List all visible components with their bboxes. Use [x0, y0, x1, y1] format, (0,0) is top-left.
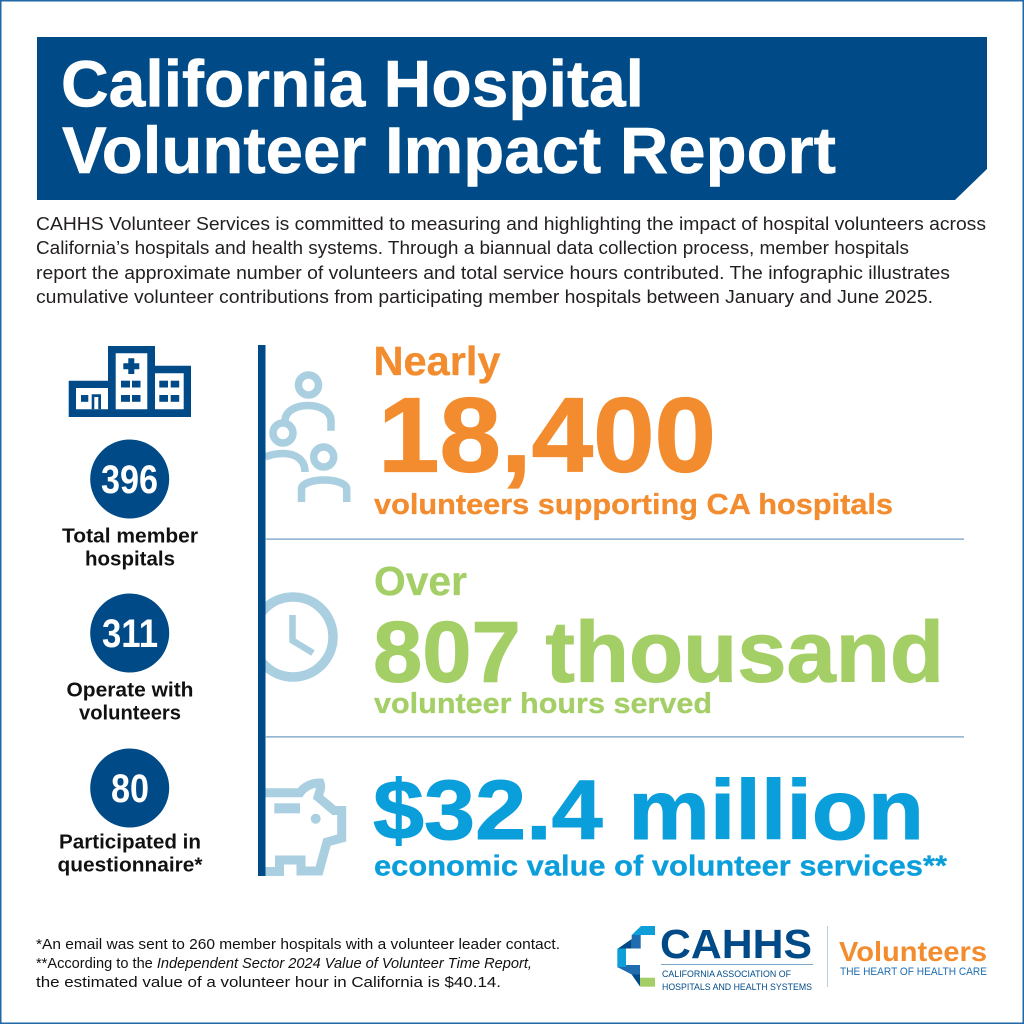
footnotes [36, 937, 560, 991]
footnotes: **According to the Independent Sector 2024 Value of Volunteer Time Report, [36, 956, 532, 972]
stat: total member hospitals: hospitals [85, 548, 175, 570]
stat panel: economic value [373, 763, 948, 882]
icon: volunteers group [265, 375, 347, 502]
stat: total member hospitals: Total member [62, 524, 198, 548]
stat: participated in questionnaire [58, 748, 203, 876]
stat panel: volunteers: 18,400 [378, 376, 716, 494]
title: Volunteer Impact Report [62, 113, 836, 187]
footnotes: the estimated value of a volunteer hour in California is $40.14. [36, 975, 501, 991]
stat: total member hospitals [62, 440, 198, 570]
logo: CAHHS: HOSPITALS AND HEALTH SYSTEMS [662, 982, 812, 993]
intro text block [36, 213, 986, 307]
stat panel: hours [373, 558, 944, 720]
stat panel: hours: volunteer hours served [374, 688, 712, 720]
stat panel: economic value: economic value of volunteer services** [374, 850, 948, 882]
stat panel: economic value: $32.4 million [373, 763, 924, 857]
title: California Hospital [61, 46, 644, 120]
intro text block: report the approximate number of volunteers and total service hours contributed. The infographic illustrates [36, 262, 950, 283]
intro text block: cumulative volunteer contributions from participating member hospitals between January and June 2025. [36, 286, 933, 307]
stat: operate with volunteers [66, 594, 194, 724]
stat: participated in questionnaire: questionnaire* [58, 854, 203, 876]
stat: participated in questionnaire: 80 [111, 767, 149, 811]
logo: CAHHS [617, 921, 813, 993]
stat panel: volunteers: volunteers supporting CA hospitals [374, 489, 893, 521]
stat: participated in questionnaire: Participated in [59, 830, 201, 854]
stat: operate with volunteers: Operate with [66, 678, 194, 702]
logo: CAHHS: CALIFORNIA ASSOCIATION OF [662, 969, 791, 980]
stat: operate with volunteers: volunteers [79, 702, 181, 724]
icon: hospital building [69, 346, 191, 417]
vertical divider bar [258, 345, 266, 876]
logo: Volunteers: Volunteers [839, 936, 987, 967]
intro text block: California’s hospitals and health systems. Through a biannual data collection process, member hospitals [36, 237, 909, 258]
stat panel: volunteers [374, 338, 893, 521]
stat panel: hours: 807 thousand [373, 604, 944, 700]
intro text block: CAHHS Volunteer Services is committed to measuring and highlighting the impact of hospital volunteers across [36, 213, 986, 234]
stat: total member hospitals: 396 [101, 458, 158, 502]
stat panel: volunteers: Nearly [374, 338, 501, 384]
icon: clock [253, 597, 333, 677]
stat: operate with volunteers: 311 [102, 612, 158, 656]
footnotes: *An email was sent to 260 member hospitals with a volunteer leader contact. [36, 937, 560, 953]
title banner [37, 37, 987, 200]
icon: piggy bank [265, 783, 342, 872]
logo: CAHHS: CAHHS [660, 921, 812, 967]
logo: Volunteers: THE HEART OF HEALTH CARE [840, 966, 987, 978]
stat panel: hours: Over [374, 558, 467, 604]
title [61, 46, 836, 187]
